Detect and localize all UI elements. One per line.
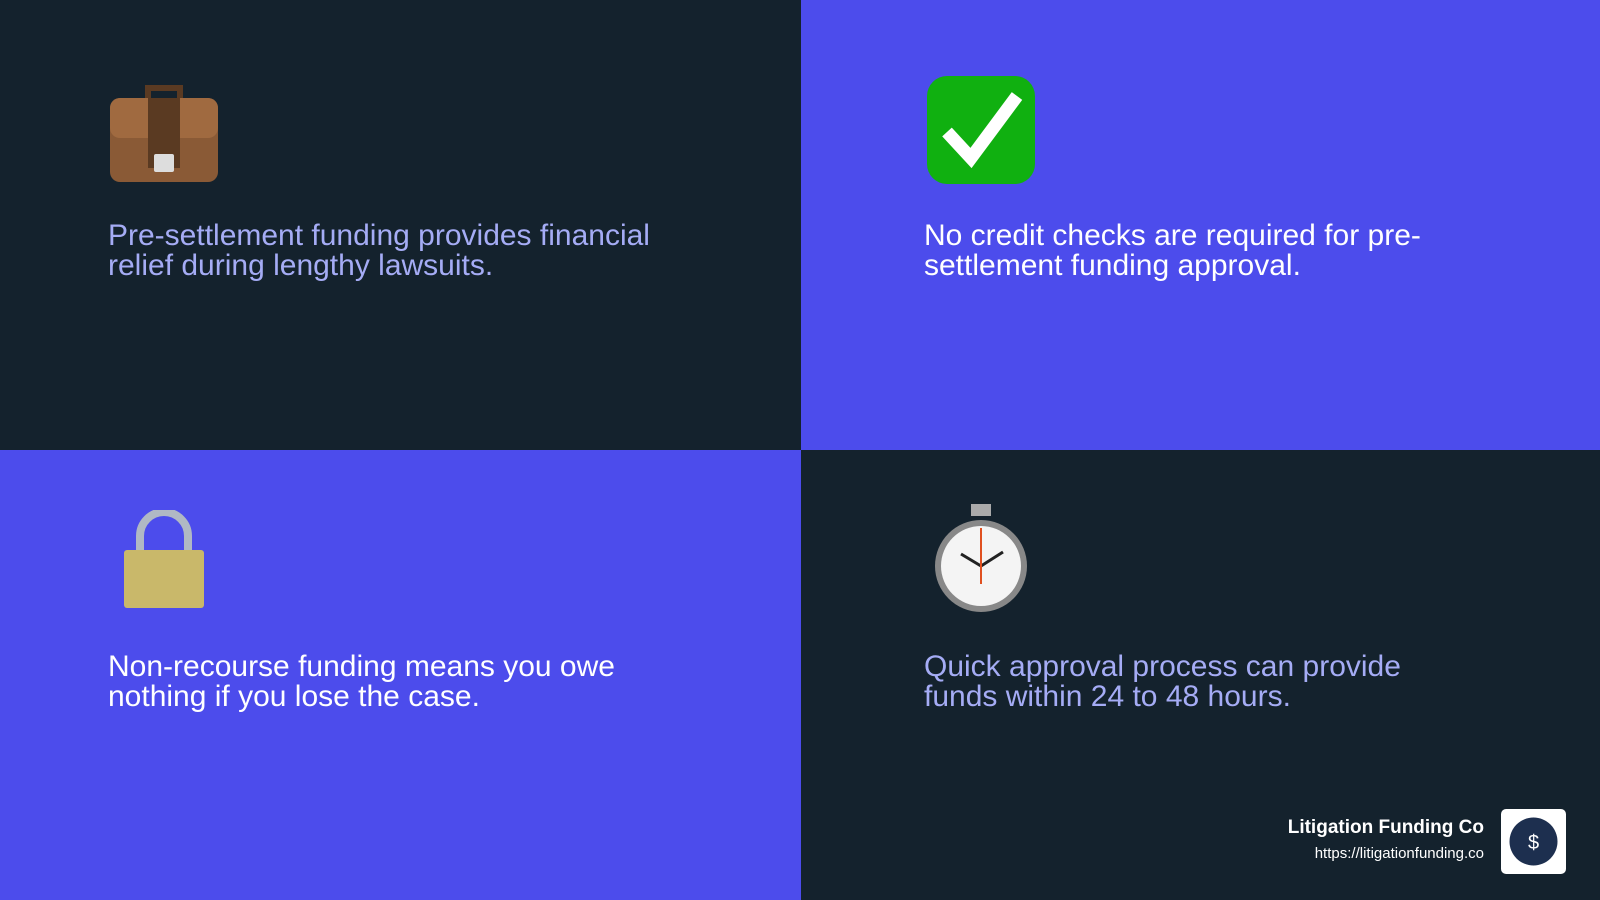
text: quick approval: Quick approval process can provide funds within 24 to 48 hours. bbox=[924, 650, 1401, 713]
panel: quick approval bbox=[801, 450, 1600, 900]
icon: check mark bbox=[927, 76, 1035, 184]
icon: briefcase bbox=[110, 85, 218, 182]
icon: stopwatch bbox=[935, 504, 1027, 612]
text: financial relief: Pre-settlement funding provides financial relief during lengthy lawsuits. bbox=[108, 219, 650, 282]
logo bbox=[1501, 809, 1566, 874]
text: no credit checks: No credit checks are required for pre-settlement funding approval. bbox=[924, 219, 1421, 282]
logo: $ bbox=[1528, 832, 1539, 854]
brand url: https://litigationfunding.co bbox=[1315, 845, 1484, 862]
brand block bbox=[1288, 809, 1566, 874]
panel: non-recourse bbox=[0, 450, 801, 900]
brand name: Litigation Funding Co bbox=[1288, 817, 1484, 838]
text: non-recourse: Non-recourse funding means you owe nothing if you lose the case. bbox=[108, 650, 615, 713]
panel: financial relief bbox=[0, 0, 801, 450]
panel: no credit checks bbox=[801, 0, 1600, 450]
icon: padlock bbox=[124, 510, 204, 608]
